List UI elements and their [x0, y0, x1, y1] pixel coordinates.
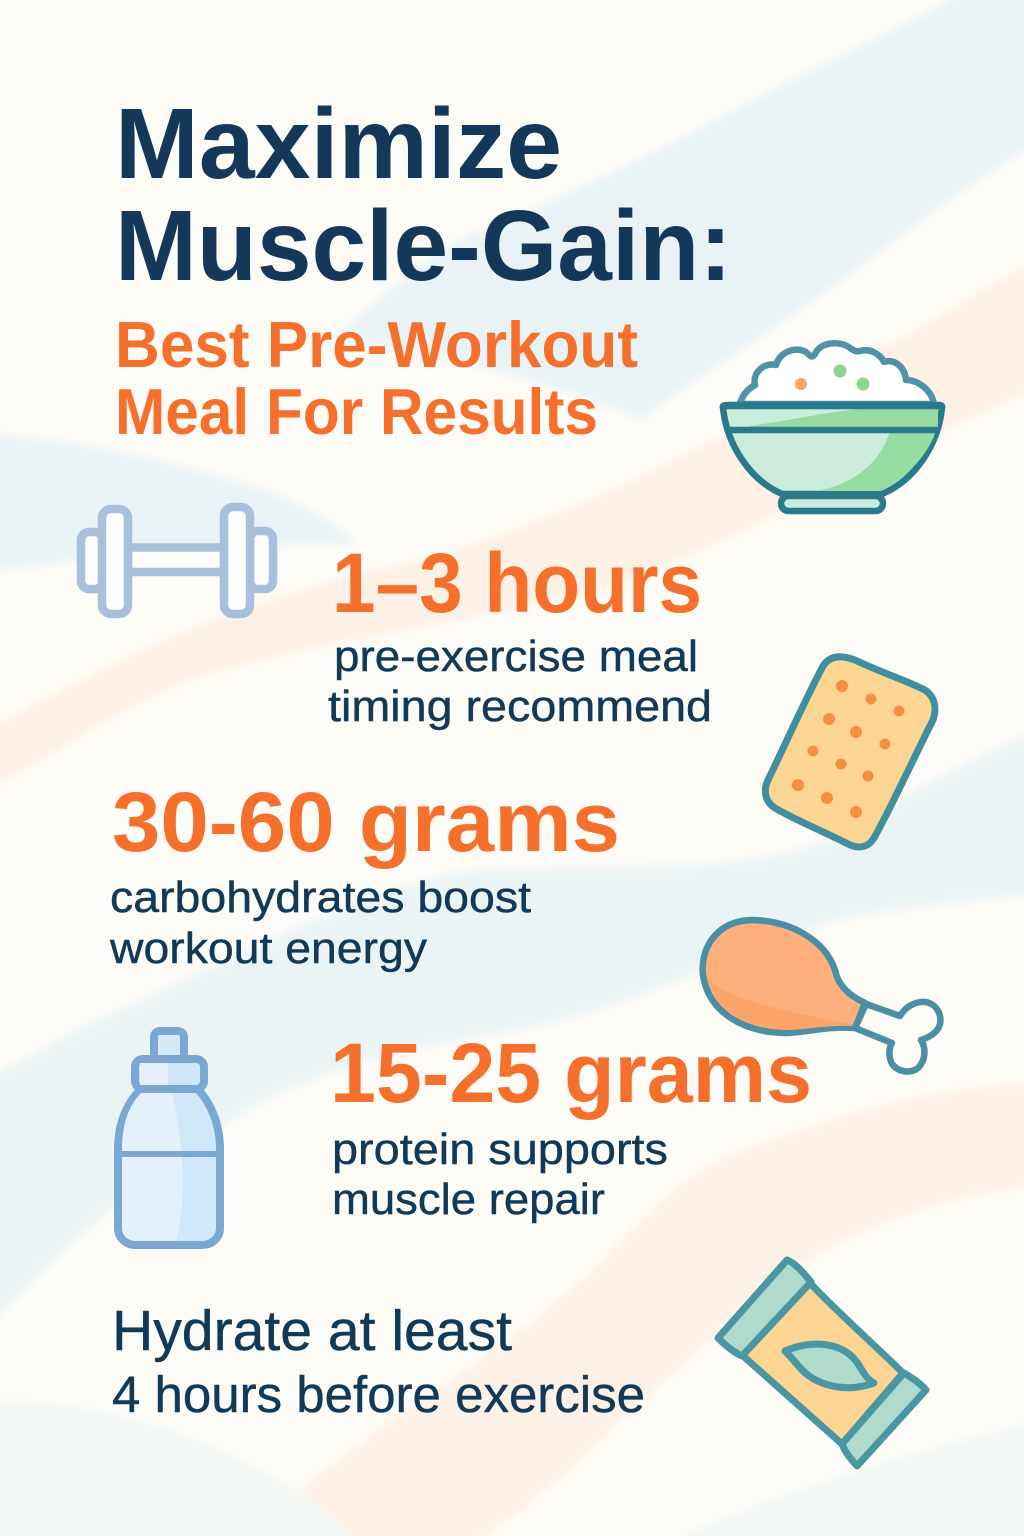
title	[115, 88, 732, 302]
title: Maximize	[115, 88, 562, 200]
subtitle: Meal For Results	[115, 375, 598, 448]
stat: meal timing: 1–3 hours	[332, 536, 702, 630]
subtitle: Best Pre-Workout	[115, 308, 638, 381]
icon: cracker	[765, 657, 935, 847]
stat: protein: protein supports	[332, 1125, 668, 1174]
icon: snack bar wrapper	[718, 1260, 926, 1466]
hydration note	[112, 1299, 645, 1423]
stat: protein: 15-25 grams	[330, 1026, 812, 1120]
icon: rice bowl	[723, 343, 942, 511]
icon: water bottle	[118, 1031, 220, 1245]
stat: protein	[330, 1026, 812, 1224]
hydration note: 4 hours before exercise	[112, 1366, 645, 1423]
title: Muscle-Gain:	[115, 190, 732, 302]
icon: dumbbell	[81, 507, 273, 614]
stat: carbohydrates	[109, 775, 620, 973]
stat: protein: muscle repair	[332, 1175, 605, 1224]
stat: carbohydrates: carbohydrates boost	[110, 873, 531, 922]
stat: meal timing: timing recommend	[328, 682, 712, 731]
stat: carbohydrates: 30-60 grams	[112, 775, 620, 869]
stat: meal timing: pre-exercise meal	[334, 632, 698, 681]
stat: meal timing	[328, 536, 712, 731]
icon: chicken drumstick	[703, 920, 940, 1071]
subtitle	[115, 308, 638, 448]
hydration note: Hydrate at least	[112, 1299, 512, 1363]
stat: carbohydrates: workout energy	[109, 924, 427, 973]
